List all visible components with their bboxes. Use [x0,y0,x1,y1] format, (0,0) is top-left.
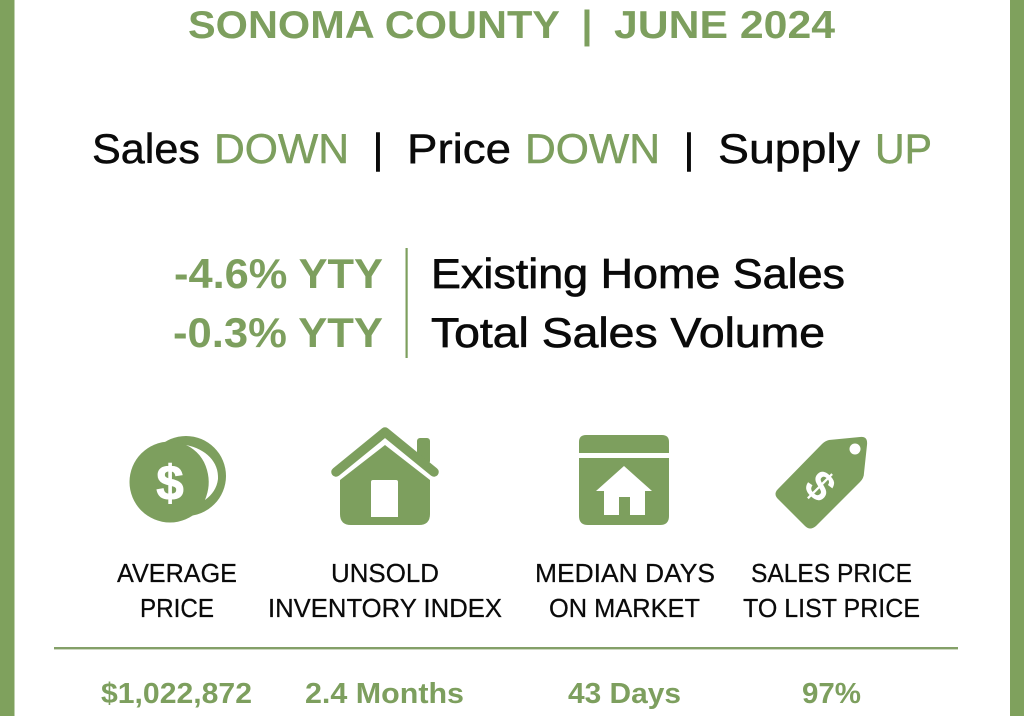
market summary headline: Supply [718,125,860,172]
icon: price tag: $ [795,461,845,511]
value: unsold inventory: 2.4 Months [305,678,464,710]
market summary headline: | [684,125,694,172]
market summary headline: DOWN [525,125,660,172]
market summary headline: DOWN [214,125,349,172]
label: average price: AVERAGE [117,558,237,588]
market summary headline: Sales [92,125,200,172]
label: existing home sales: Existing Home Sales [431,250,845,297]
label: median days on market [535,558,715,623]
stat: total sales volume change: -0.3% YTY [173,309,383,356]
icon: price tag [776,437,867,528]
title: JUNE 2024 [614,4,835,47]
market summary headline: UP [875,125,932,172]
year-to-year stats [173,248,845,358]
icon: coins: $ [156,457,184,511]
value: average price: $1,022,872 [101,678,252,710]
label: sales price to list price: TO LIST PRICE [743,593,920,623]
label: median days on market: ON MARKET [549,593,700,623]
label: median days on market: MEDIAN DAYS [535,558,715,588]
label: unsold inventory index: UNSOLD [331,558,439,588]
icon: calendar with house [579,435,669,525]
stat: existing home sales change: -4.6% YTY [174,250,383,297]
icon: house with chimney [336,432,434,525]
label: unsold inventory index: INVENTORY INDEX [268,593,502,623]
label: average price: PRICE [140,593,214,623]
market summary headline: Price [407,125,511,172]
title: | [582,4,592,47]
icon: coins [130,436,226,522]
market summary headline [92,125,932,172]
label: sales price to list price [743,558,920,623]
title [188,4,835,47]
label: average price [117,558,237,623]
label: sales price to list price: SALES PRICE [751,558,912,588]
label: unsold inventory index [268,558,502,623]
value: sales to list: 97% [802,678,861,710]
value: median days: 43 Days [568,678,681,710]
title: SONOMA COUNTY [188,4,560,47]
label: total sales volume: Total Sales Volume [431,309,825,356]
market summary headline: | [373,125,383,172]
